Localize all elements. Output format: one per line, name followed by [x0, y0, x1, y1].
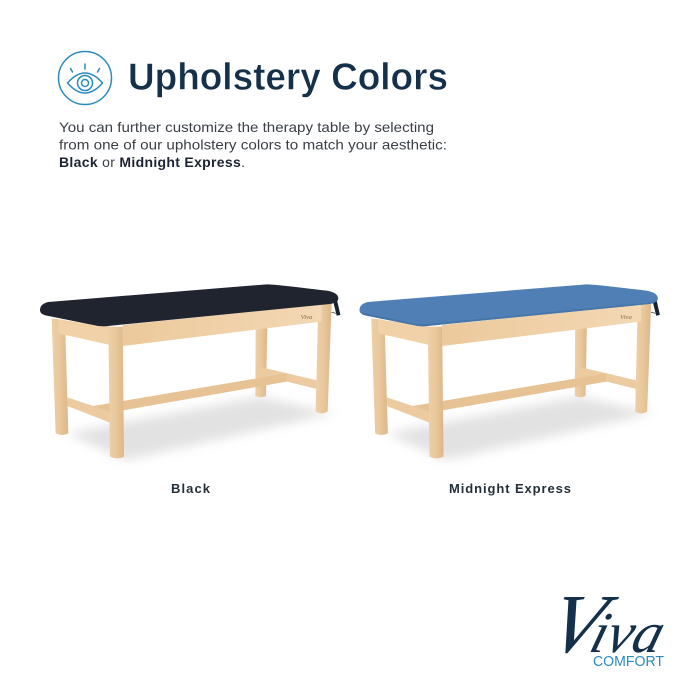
description text — [59, 119, 447, 170]
table: midnight express upholstery: Viva — [620, 314, 633, 321]
label: Black: Black — [171, 481, 211, 496]
description text: from one of our upholstery colors to match your aesthetic: — [59, 136, 447, 152]
table: black upholstery — [40, 284, 340, 460]
table: black upholstery: Viva — [301, 314, 313, 321]
label: Midnight Express: Midnight Express — [449, 481, 571, 496]
description text: Black or Midnight Express. — [59, 154, 245, 170]
logo: Viva Comfort: COMFORT — [593, 654, 664, 670]
logo: Viva Comfort: Viva — [539, 578, 680, 671]
icon: eye in circle — [58, 52, 112, 104]
title: Upholstery Colors — [128, 56, 448, 98]
table: midnight express upholstery — [359, 284, 659, 460]
description text: You can further customize the therapy table by selecting — [59, 119, 434, 135]
